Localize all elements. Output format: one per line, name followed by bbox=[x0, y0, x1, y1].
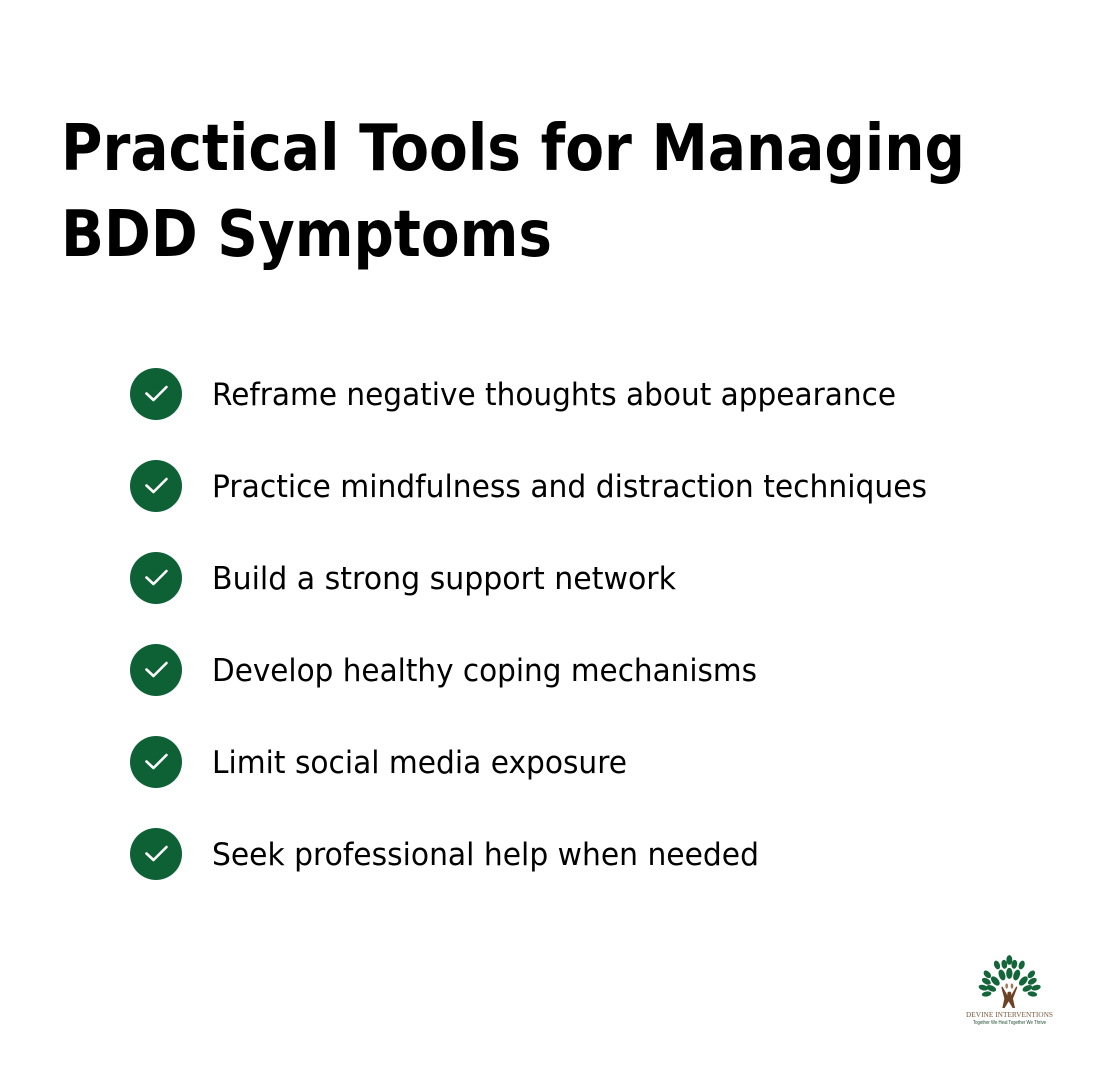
logo: Devine Interventions tree bbox=[966, 956, 1053, 1026]
title: BDD Symptoms bbox=[61, 198, 552, 272]
item: coping mechanisms: Develop healthy coping mechanisms bbox=[212, 653, 757, 689]
item: support network bbox=[130, 552, 676, 604]
item: limit social media: Limit social media exposure bbox=[212, 745, 627, 781]
title: Practical Tools for Managing bbox=[61, 112, 965, 186]
item: reframe negative thoughts bbox=[130, 368, 896, 420]
item: reframe negative thoughts: Reframe negative thoughts about appearance bbox=[212, 377, 896, 413]
item: professional help bbox=[130, 828, 759, 880]
title bbox=[61, 112, 965, 272]
item: mindfulness and distraction: Practice mindfulness and distraction techniques bbox=[212, 469, 927, 505]
item: support network: Build a strong support network bbox=[212, 561, 676, 597]
logo name: DEVINE INTERVENTIONS bbox=[966, 1010, 1053, 1019]
checklist bbox=[130, 368, 927, 880]
icon: tree leaves bbox=[979, 956, 1041, 997]
item: mindfulness and distraction bbox=[130, 460, 927, 512]
item: coping mechanisms bbox=[130, 644, 757, 696]
item: limit social media bbox=[130, 736, 627, 788]
icon: person figure bbox=[1001, 983, 1017, 1008]
logo tagline: Together We Heal Together We Thrive bbox=[973, 1020, 1046, 1026]
item: professional help: Seek professional help when needed bbox=[212, 837, 759, 873]
